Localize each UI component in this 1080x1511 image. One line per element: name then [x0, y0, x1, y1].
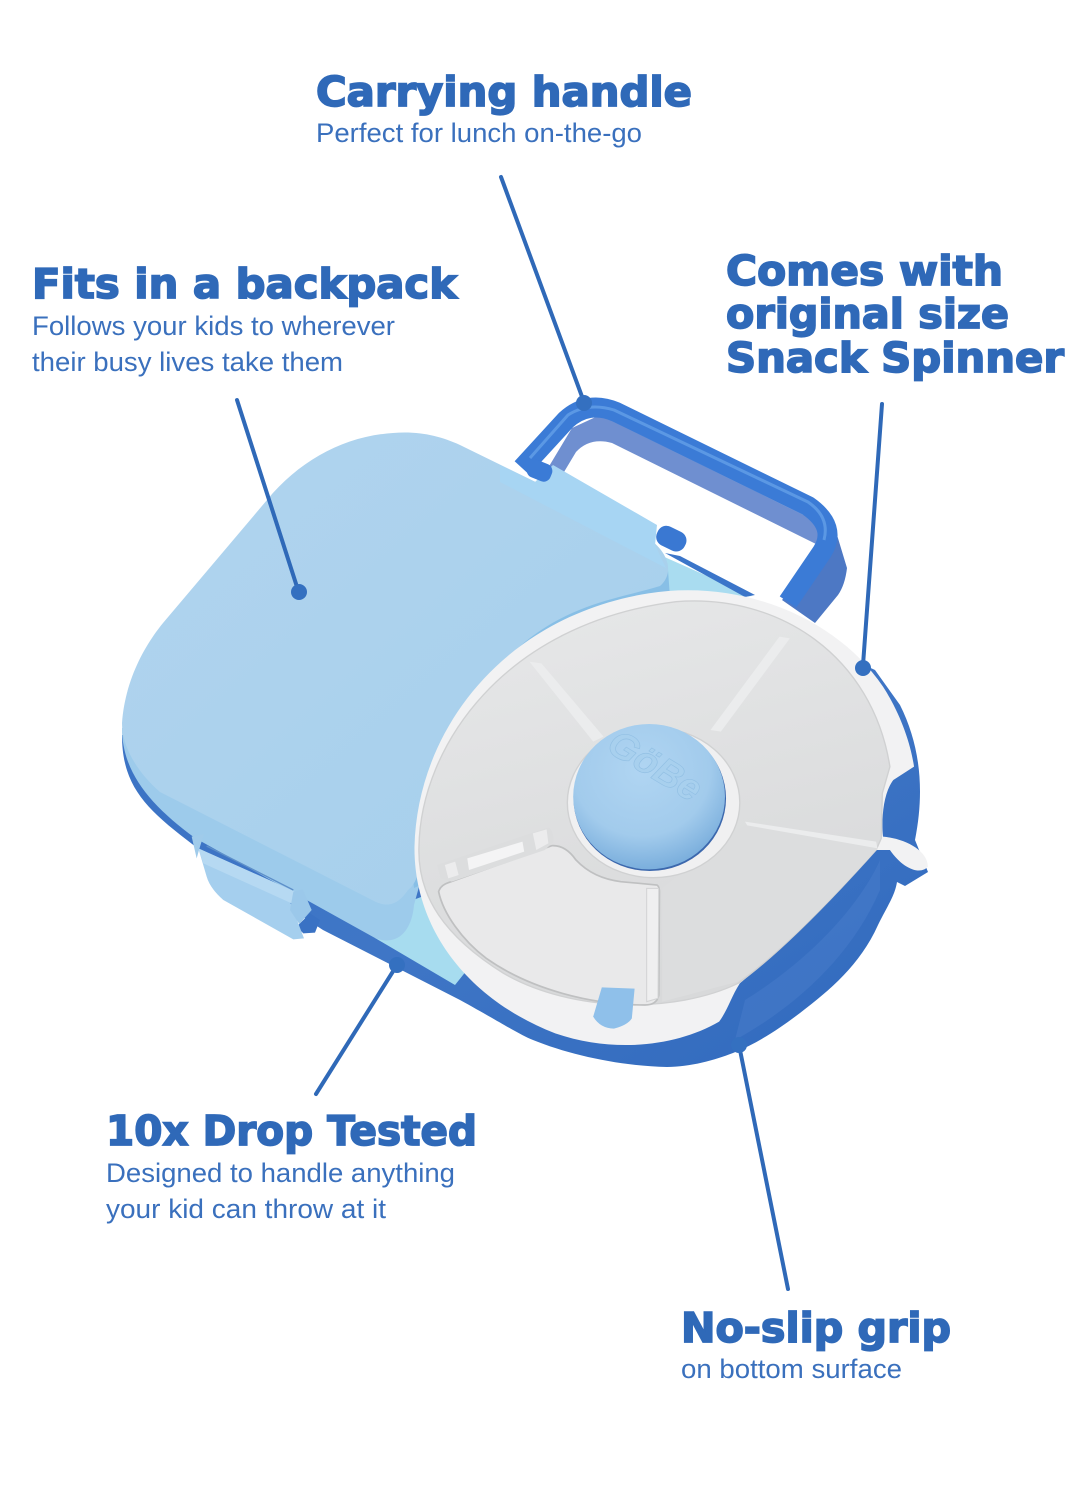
heading: No-slip grip: [681, 1304, 951, 1352]
callout: fits in a backpack: [32, 260, 459, 377]
lunch box product illustration: [122, 407, 928, 1067]
dispenser tab: [593, 987, 635, 1029]
hatch door: [439, 846, 659, 1005]
lid top surface: [122, 433, 668, 905]
GoBe logo: GöBe: [600, 722, 710, 810]
leader line: spinner: [855, 404, 882, 676]
hatch hinge: [437, 827, 554, 882]
front latch: [192, 834, 320, 939]
subtext: on bottom surface: [681, 1354, 902, 1384]
carrying handle: [522, 407, 847, 623]
spinner grey compartments: [419, 601, 890, 1005]
lower tray highlight: [735, 860, 880, 1040]
subtext: their busy lives take them: [32, 347, 343, 377]
leader line: drop tested: [316, 957, 405, 1094]
front teal patch: [375, 890, 475, 985]
heading: Snack Spinner: [726, 334, 1065, 382]
heading: Fits in a backpack: [32, 260, 459, 308]
spinner white rim: [414, 590, 928, 1045]
leader line: backpack: [237, 400, 307, 600]
subtext: Designed to handle anything: [106, 1158, 455, 1188]
snack spinner: [414, 590, 928, 1045]
subtext: your kid can throw at it: [106, 1194, 387, 1224]
callout: no-slip grip: [681, 1304, 951, 1384]
leader line: no-slip grip: [731, 1037, 788, 1289]
hinge knobs: [525, 458, 690, 555]
lid back lip: [500, 465, 666, 568]
dome shadow: [574, 726, 726, 871]
blue dome knob: [573, 724, 725, 869]
divider spokes: [529, 662, 604, 742]
callout: snack spinner: [726, 247, 1065, 382]
heading: Carrying handle: [316, 68, 692, 116]
leader line: carrying handle: [501, 177, 592, 411]
base tray: [122, 560, 928, 1067]
lid shade under spinner edge: [410, 570, 672, 888]
heading: 10x Drop Tested: [106, 1107, 477, 1155]
subtext: Follows your kids to wherever: [32, 311, 395, 341]
callout: drop tested: [106, 1107, 477, 1224]
back blue rail: [665, 553, 755, 597]
heading: original size: [726, 290, 1009, 338]
subtext: Perfect for lunch on-the-go: [316, 118, 642, 148]
callout: carrying handle: [316, 68, 692, 148]
lid side wall: [122, 640, 470, 940]
heading: Comes with: [726, 247, 1003, 295]
hub ring: [567, 728, 740, 878]
back strip behind lid: [620, 555, 752, 610]
